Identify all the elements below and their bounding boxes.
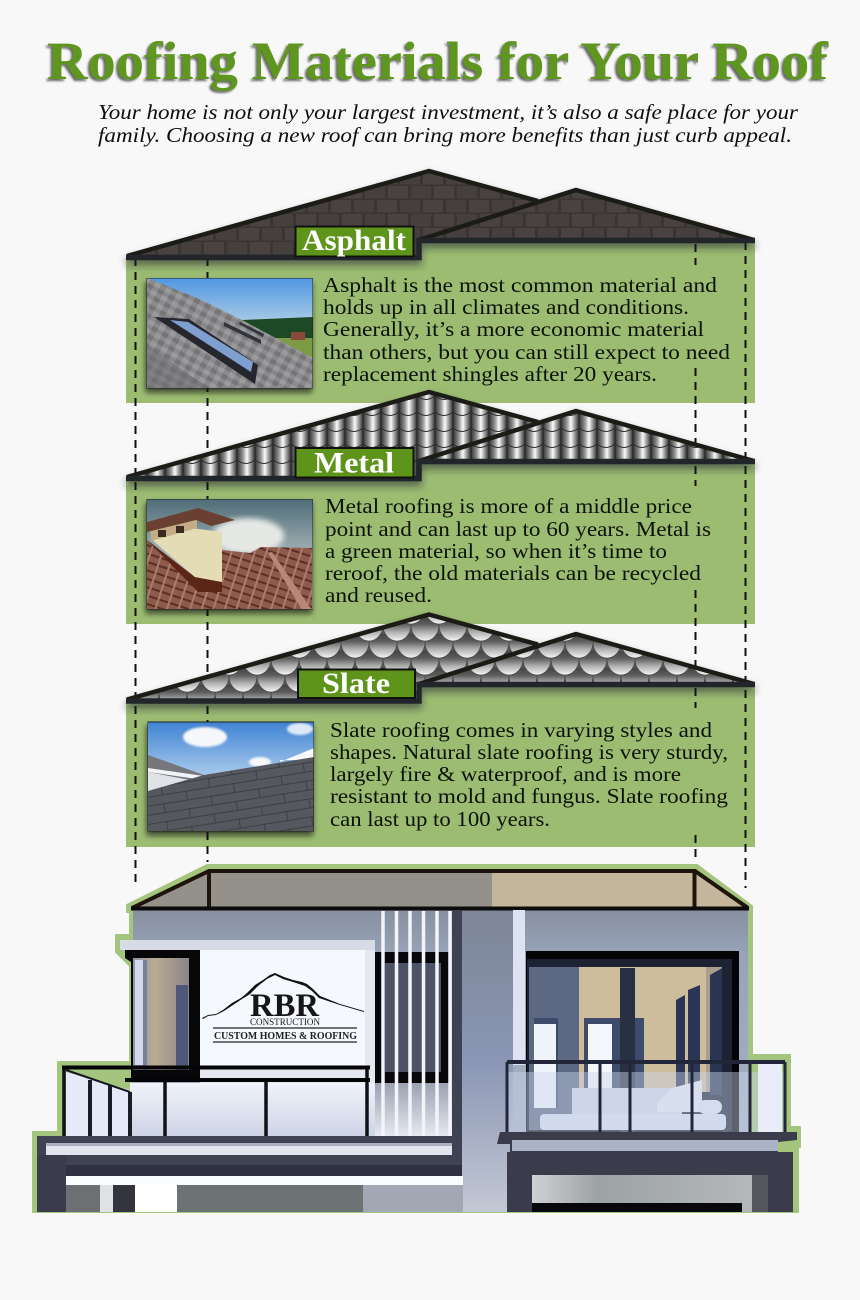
lower left structure — [37, 1155, 463, 1212]
photo: metal roof with chimney — [146, 499, 313, 610]
text: metal description: reroof, the old materials can be recycled — [325, 561, 702, 585]
text: asphalt description: than others, but you can still expect to need — [323, 340, 731, 364]
text: metal description — [325, 494, 711, 607]
lower right structure — [507, 1152, 793, 1212]
right balcony slab — [497, 1132, 797, 1152]
text: asphalt description: holds up in all climates and conditions. — [323, 295, 689, 319]
title: Roofing Materials for Your Roof — [47, 31, 829, 91]
right window — [526, 951, 739, 1135]
text: metal description: a green material, so when it’s time to — [325, 539, 667, 563]
photo: asphalt roof with skylights — [146, 278, 313, 389]
sofa — [540, 1080, 726, 1130]
subtitle: Your home is not only your largest investment, it’s also a safe place for your — [98, 100, 799, 124]
logo: RBR Construction — [202, 973, 364, 1042]
label: Metal — [296, 446, 414, 480]
dark slat window — [375, 952, 452, 1138]
right balcony glass railing — [507, 1062, 785, 1132]
label: Slate: Slate — [322, 667, 390, 700]
white column — [513, 910, 525, 1065]
text: slate description: shapes. Natural slate roofing is very sturdy, — [330, 740, 728, 764]
title: Roofing Materials for Your Roof — [45, 33, 827, 93]
subtitle — [98, 100, 799, 147]
logo: RBR Construction: RBR — [250, 988, 320, 1024]
label: Slate — [298, 667, 415, 700]
sign board — [200, 950, 375, 1090]
text: metal description: and reused. — [325, 583, 432, 607]
panel: slate background — [126, 684, 755, 847]
logo: RBR Construction: CUSTOM HOMES & ROOFING — [214, 1031, 357, 1042]
logo: RBR Construction: CONSTRUCTION — [250, 1018, 320, 1028]
text: slate description: resistant to mold and fungus. Slate roofing — [330, 784, 729, 808]
text: asphalt description: Generally, it’s a more economic material — [323, 317, 704, 341]
left balcony railing — [62, 1068, 375, 1136]
left ledge — [120, 940, 375, 950]
subtitle: family. Choosing a new roof can bring more benefits than just curb appeal. — [98, 123, 792, 147]
text: slate description: Slate roofing comes in varying styles and — [330, 718, 713, 742]
panel: metal background — [126, 461, 755, 624]
roof: asphalt — [126, 171, 755, 258]
white vertical slats — [383, 911, 450, 1136]
text: slate description — [330, 718, 729, 831]
label: Asphalt: Asphalt — [302, 224, 406, 257]
house green outline — [33, 865, 800, 1212]
left balcony slab — [37, 1136, 462, 1166]
left window — [125, 950, 200, 1079]
panel: asphalt background — [126, 240, 755, 403]
text: asphalt description: Asphalt is the most common material and — [323, 273, 718, 297]
dashed guide lines — [136, 242, 746, 888]
text: slate description: largely fire & waterproof, and is more — [330, 762, 681, 786]
roof: slate — [126, 614, 755, 701]
text: slate description: can last up to 100 years. — [330, 807, 550, 831]
upper wall — [133, 908, 748, 1212]
roof: metal — [126, 392, 755, 478]
text: metal description: point and can last up to 60 years. Metal is — [325, 517, 711, 541]
central wall section — [462, 910, 513, 1212]
label: Metal: Metal — [314, 446, 394, 480]
photo: slate roof and sky — [148, 722, 314, 832]
roof fascia — [131, 871, 749, 908]
text: asphalt description — [323, 273, 731, 386]
house illustration — [33, 865, 800, 1212]
dark column — [452, 910, 462, 1165]
text: metal description: Metal roofing is more of a middle price — [325, 494, 692, 518]
text: asphalt description: replacement shingles after 20 years. — [323, 362, 657, 386]
